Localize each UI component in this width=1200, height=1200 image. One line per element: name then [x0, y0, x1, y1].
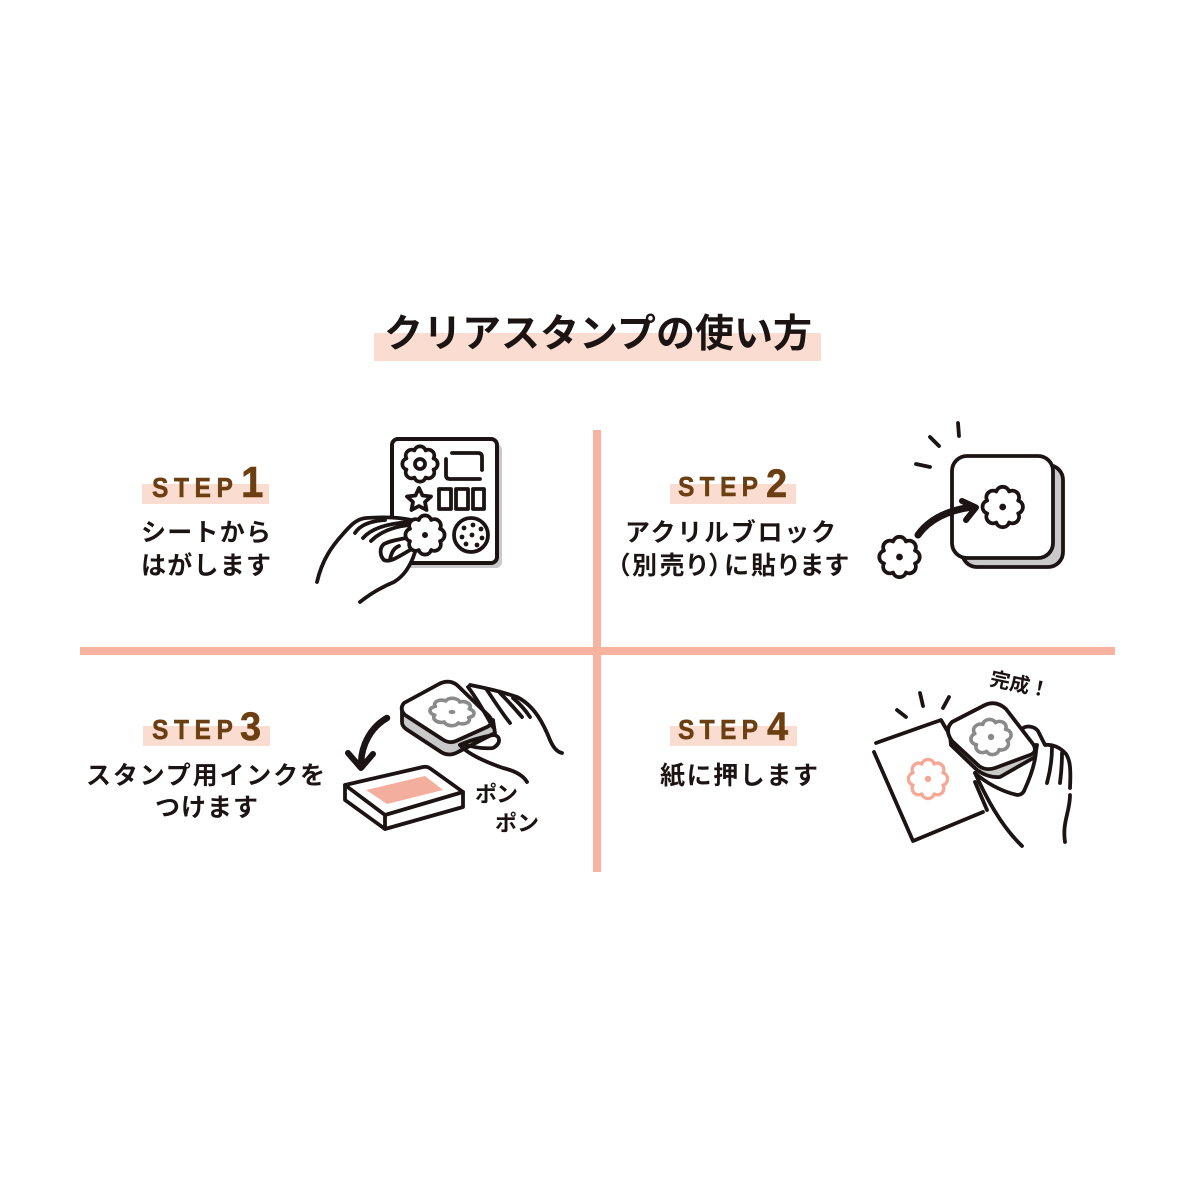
panel: step 1 [141, 439, 502, 602]
step 3 text: スタンプ用インクを [86, 756, 325, 792]
step 2 heading [670, 462, 796, 506]
step 1 text [141, 513, 271, 582]
step 3 text [86, 756, 325, 824]
step 2 text: アクリルブロック [625, 513, 836, 549]
step 2 text [617, 513, 848, 582]
step 1 text: はがします [141, 546, 271, 582]
panel: step 2 [617, 423, 1063, 582]
step 3 text: つけます [155, 788, 258, 824]
step 1 heading: 1 [241, 457, 264, 506]
cross dividers [80, 430, 1115, 872]
panel: step 4 [660, 663, 1070, 846]
step 2 heading: 2 [766, 462, 787, 506]
step 1 heading: STEP [152, 472, 233, 503]
step 2 text: （別売り）に貼ります [617, 546, 848, 582]
sound text [475, 777, 539, 838]
step 2 heading: STEP [678, 471, 758, 502]
step 4 heading: 4 [767, 705, 788, 749]
complete label: 完成！ [988, 663, 1052, 703]
sound text: ポン [475, 777, 518, 809]
sound text: ポン [495, 806, 539, 838]
step 4 heading: STEP [678, 714, 758, 745]
icon: sticking the stamp onto the acrylic block [879, 423, 1063, 577]
step 4 text: 紙に押します [660, 756, 818, 792]
icon: inking the stamp on the pad [345, 682, 562, 829]
step 3 heading [143, 705, 270, 749]
step 1 heading [142, 457, 269, 506]
step 1 text: シートから [141, 513, 271, 549]
title: クリアスタンプの使い方 [384, 303, 812, 359]
step 3 heading: 3 [240, 705, 261, 749]
icon: peeling a stamp from the sheet [317, 439, 502, 602]
step 3 heading: STEP [152, 714, 233, 745]
panel: step 3 [86, 682, 562, 838]
icon: pressing the stamp on paper [874, 693, 1070, 846]
step 4 heading [670, 705, 797, 749]
